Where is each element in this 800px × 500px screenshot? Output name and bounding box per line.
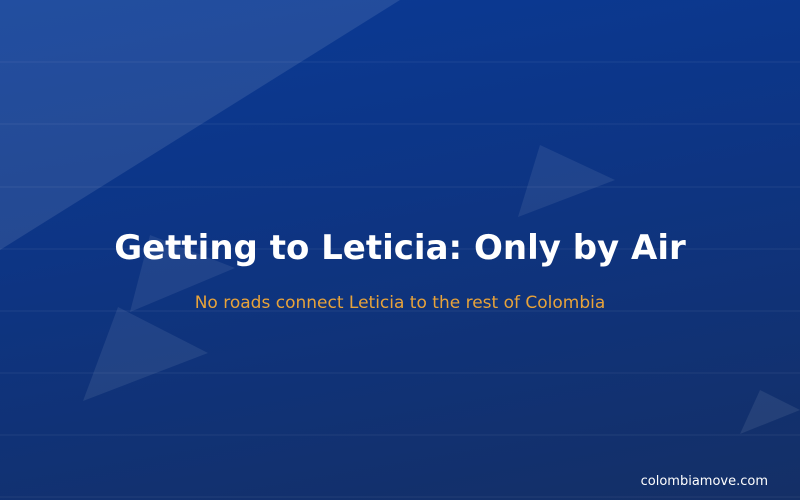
footer: source: colombiamove.com (641, 474, 768, 489)
icon: triangle lower left (83, 307, 208, 401)
title: Getting to Leticia: Only by Air (114, 228, 686, 268)
icon: triangle right (518, 145, 615, 217)
icon: triangle behind title (130, 235, 235, 312)
decorative large triangle (0, 0, 400, 250)
icon: triangle bottom right (740, 390, 800, 434)
subtitle: No roads connect Leticia to the rest of Colombia (195, 293, 605, 313)
